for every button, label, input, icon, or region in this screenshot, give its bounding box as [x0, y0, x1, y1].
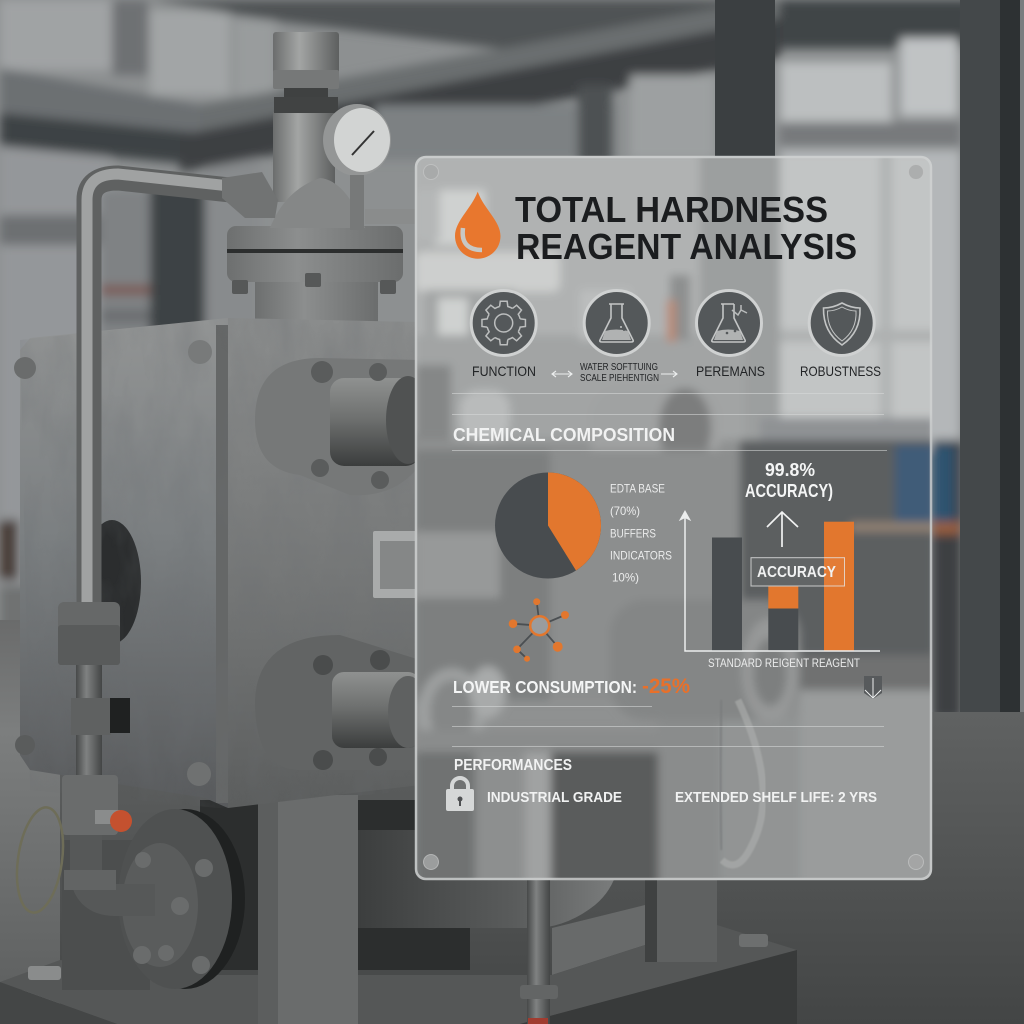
- secondary pipe: [365, 209, 420, 224]
- heading: chemical composition: CHEMICAL COMPOSITION: [453, 424, 675, 445]
- texture: [20, 320, 286, 806]
- accuracy value: 99.8%: [765, 460, 815, 480]
- bar axis label: STANDARD REIGENT REAGENT: [708, 656, 861, 670]
- tank neck: [255, 280, 378, 330]
- flange: [227, 226, 403, 282]
- floor under cylinder: [552, 905, 645, 975]
- feature labels: [472, 362, 881, 384]
- feature labels: ROBUSTNESS: [800, 363, 881, 379]
- box front: [228, 318, 420, 808]
- rear pump cylinder: [200, 800, 470, 970]
- icon: gear: [471, 290, 536, 356]
- title: [515, 189, 857, 267]
- drain elbow: [86, 835, 155, 900]
- icon: molecule: [509, 598, 569, 662]
- pie legend: 10%): [612, 570, 639, 584]
- up arrow: [767, 512, 798, 547]
- pump flange: [125, 809, 245, 989]
- upper port plate: [255, 358, 420, 495]
- panel: glass card: [410, 150, 940, 887]
- base bolts: [28, 966, 61, 980]
- box left plate: [20, 318, 228, 808]
- gauge: [323, 104, 391, 176]
- bar chart: [680, 460, 880, 670]
- box bolts: [14, 357, 36, 379]
- ghost ring: [722, 700, 763, 865]
- pie legend: BUFFERS: [610, 526, 656, 540]
- feature labels: WATER SOFTTUING: [580, 362, 658, 373]
- accuracy value: ACCURACY): [745, 481, 833, 501]
- corner screws: [424, 164, 924, 870]
- icon: flask: [584, 290, 649, 356]
- pie chart: [495, 472, 601, 578]
- base plate: [0, 925, 797, 1024]
- arrows between features: [552, 371, 677, 377]
- title: REAGENT ANALYSIS: [516, 226, 857, 267]
- opening: [83, 520, 141, 644]
- panel glass tone: [410, 150, 940, 887]
- wire ring: [11, 804, 69, 916]
- pie legend: EDTA BASE: [610, 482, 665, 496]
- curved pipe: [89, 178, 230, 610]
- feature labels: SCALE PIEHENTIGN: [580, 373, 659, 384]
- accuracy box: ACCURACY: [757, 564, 836, 581]
- text: industrial grade: INDUSTRIAL GRADE: [487, 789, 622, 806]
- accuracy value: [745, 460, 833, 501]
- icon: orange water drop: [455, 192, 500, 259]
- accuracy box: [751, 558, 844, 586]
- feature labels: PEREMANS: [696, 363, 765, 379]
- valve: [58, 602, 120, 654]
- icon: flask with sparks: [696, 290, 762, 356]
- lower port plate: [255, 635, 420, 770]
- title: TOTAL HARDNESS: [515, 189, 828, 230]
- pie legend: [610, 482, 672, 584]
- rear legs: [645, 880, 717, 962]
- front leg: [258, 795, 358, 1024]
- icon: down arrow: [864, 676, 882, 699]
- callout: lower consumption: -25%: [642, 675, 690, 698]
- heading: performances: PERFORMANCES: [454, 757, 572, 774]
- icon: shield: [809, 290, 874, 356]
- nameplate: [373, 531, 420, 598]
- machine: steel tank with pipes: [0, 32, 797, 1024]
- body and cap: [273, 112, 335, 202]
- support leg: [62, 840, 150, 990]
- pie legend: (70%): [610, 504, 640, 518]
- feature labels: FUNCTION: [472, 363, 536, 379]
- red cap: [110, 810, 132, 832]
- callout: lower consumption: LOWER CONSUMPTION:: [453, 677, 637, 697]
- text: shelf life: EXTENDED SHELF LIFE: 2 YRS: [675, 789, 877, 806]
- pie legend: INDICATORS: [610, 548, 672, 562]
- icon: padlock: [446, 778, 474, 811]
